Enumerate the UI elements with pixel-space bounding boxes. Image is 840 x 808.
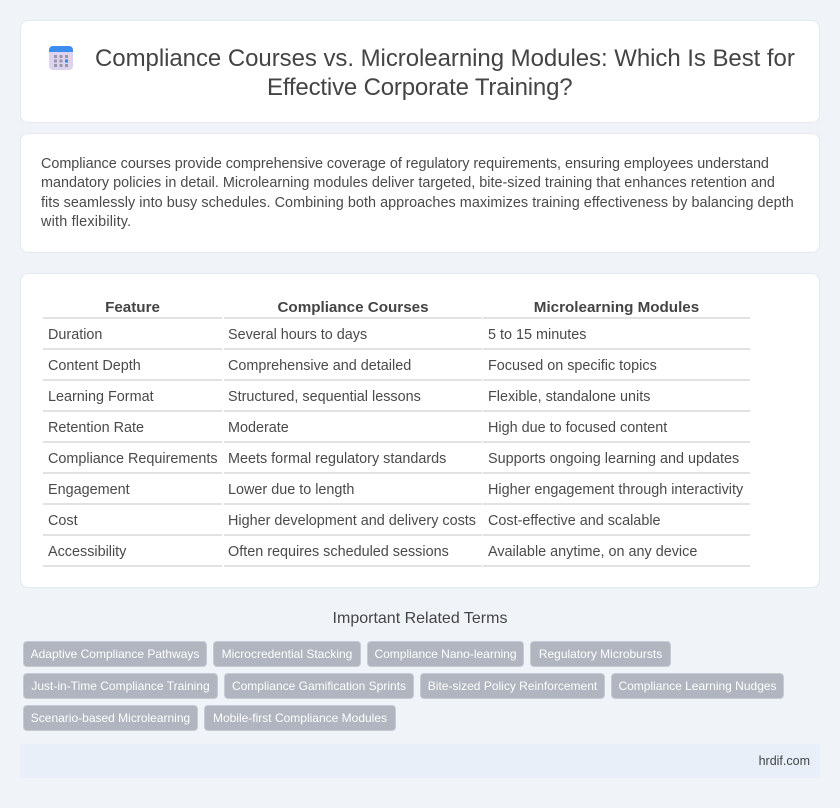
row: Retention Rate: Retention Rate (48, 420, 144, 436)
row: Duration: Several hours to days (228, 327, 367, 343)
row: Compliance Requirements: Supports ongoing learning and updates (488, 451, 739, 467)
title: Effective Corporate Training? (267, 74, 572, 101)
footer source text: hrdif.com (759, 754, 810, 768)
row: Duration: 5 to 15 minutes (488, 327, 586, 343)
panel: introduction (20, 133, 820, 253)
tag: Adaptive Compliance Pathways (31, 647, 199, 661)
row: Engagement (48, 482, 744, 498)
row: Engagement: Higher engagement through interactivity (488, 482, 743, 498)
text block: introduction: mandatory policies in detail. Microlearning modules deliver targeted, bite-sized training that enhances retention and (41, 175, 775, 191)
tag (213, 641, 361, 667)
tag list: related terms (23, 641, 784, 731)
tag: Compliance Nano-learning (374, 647, 517, 661)
row: Content Depth: Comprehensive and detailed (228, 358, 411, 374)
icon: calendar (49, 46, 73, 70)
row: Cost: Cost-effective and scalable (488, 513, 661, 529)
tag (23, 641, 207, 667)
tag (367, 641, 524, 667)
row: Engagement: Lower due to length (228, 482, 354, 498)
text block: introduction: fits seamlessly into busy schedules. Combining both approaches maximizes training effectiveness by balancing depth (41, 195, 794, 211)
tag: Scenario-based Microlearning (31, 711, 190, 725)
tag: Bite-sized Policy Reinforcement (428, 679, 597, 693)
row: Engagement: Engagement (48, 482, 130, 498)
title (95, 45, 795, 101)
row: Compliance Requirements (48, 451, 739, 467)
row: Content Depth: Content Depth (48, 358, 141, 374)
tag: Just-in-Time Compliance Training (31, 679, 210, 693)
tag (224, 673, 414, 699)
tag (530, 641, 671, 667)
panel: header (20, 20, 820, 123)
row: Accessibility: Often requires scheduled sessions (228, 544, 449, 560)
text block: introduction: with flexibility. (41, 214, 131, 230)
heading: important related terms: Important Related Terms (333, 610, 507, 627)
tag (23, 673, 218, 699)
table header: Microlearning Modules (534, 299, 699, 316)
tag: Microcredential Stacking (222, 647, 352, 661)
tag: Compliance Gamification Sprints (232, 679, 406, 693)
title: Compliance Courses vs. Microlearning Modules: Which Is Best for (95, 45, 795, 72)
table header (105, 299, 699, 316)
row: Cost: Cost (48, 513, 78, 529)
row: Content Depth (48, 358, 657, 374)
row: Learning Format: Flexible, standalone units (488, 389, 650, 405)
row: Learning Format: Structured, sequential lessons (228, 389, 421, 405)
panel: comparison table (20, 273, 820, 588)
tag: Mobile-first Compliance Modules (213, 711, 387, 725)
row: Learning Format: Learning Format (48, 389, 154, 405)
table header: Compliance Courses (277, 299, 429, 316)
row: Cost (48, 513, 661, 529)
row: Compliance Requirements: Meets formal regulatory standards (228, 451, 446, 467)
row: Duration (48, 327, 586, 343)
row: Accessibility: Available anytime, on any device (488, 544, 697, 560)
row: Learning Format (48, 389, 650, 405)
text block: introduction: Compliance courses provide comprehensive coverage of regulatory requirements, ensuring employees understand (41, 156, 769, 172)
row: Content Depth: Focused on specific topics (488, 358, 657, 374)
text block: introduction (41, 156, 794, 230)
row: Retention Rate (48, 420, 668, 436)
row: Accessibility (48, 544, 697, 560)
row: Retention Rate: High due to focused content (488, 420, 667, 436)
tag (204, 705, 396, 731)
row: Retention Rate: Moderate (228, 420, 289, 436)
row: Duration: Duration (48, 327, 102, 343)
tag (23, 705, 198, 731)
tag: Compliance Learning Nudges (618, 679, 777, 693)
tag: Regulatory Microbursts (539, 647, 662, 661)
row: Accessibility: Accessibility (48, 544, 126, 560)
row: Cost: Higher development and delivery costs (228, 513, 476, 529)
tag (420, 673, 605, 699)
row: Compliance Requirements: Compliance Requirements (48, 451, 218, 467)
table header: Feature (105, 299, 160, 316)
tag (611, 673, 784, 699)
footer bar (20, 744, 820, 778)
